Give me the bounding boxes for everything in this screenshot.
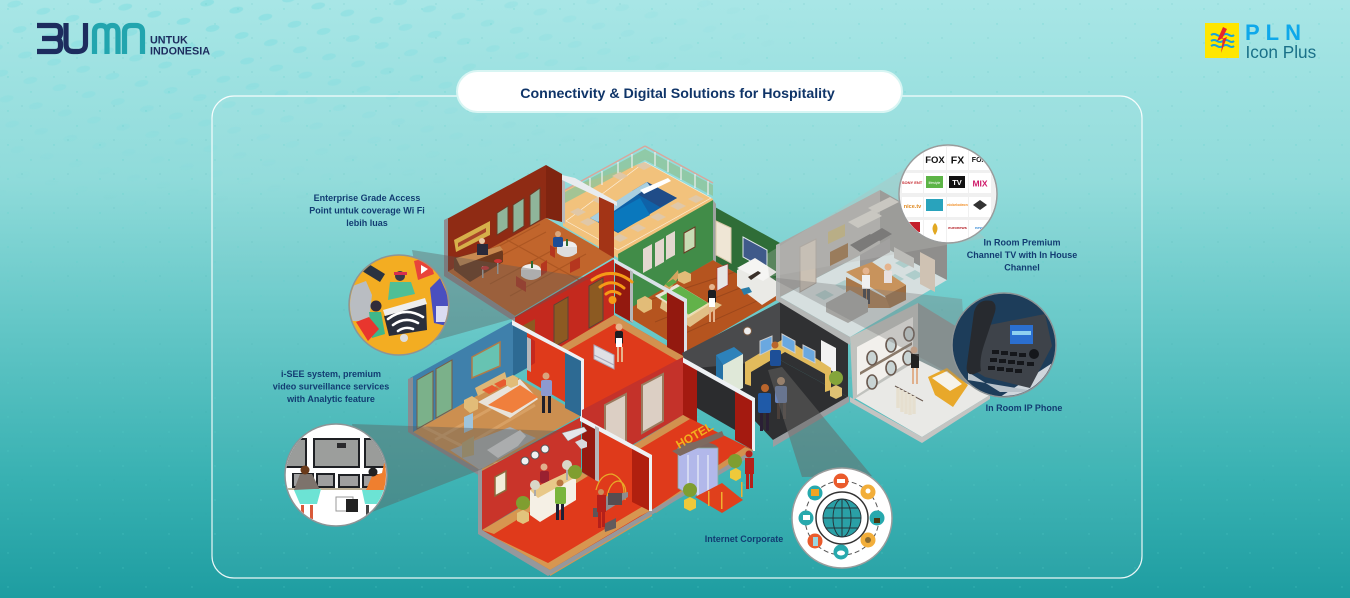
icon: wifi signal [592, 273, 632, 304]
label: ip phone: In Room IP Phone [986, 403, 1062, 413]
visitors [758, 377, 787, 431]
circle: premium tv channels: FOX [925, 155, 945, 166]
beam: cctv [352, 424, 560, 512]
logo: PLN Icon Plus [1205, 20, 1316, 62]
room: upper corridor [515, 258, 687, 412]
room: blue bedroom [408, 320, 584, 476]
label: enterprise access point: Point untuk coverage Wi Fi [309, 206, 425, 216]
lobby front wall [580, 416, 652, 511]
label: premium channel tv: Channel TV with In House [967, 250, 1077, 260]
logo: BUMN Untuk Indonesia: INDONESIA [150, 46, 210, 58]
room: rooftop pool [563, 146, 713, 258]
desk and fridge [717, 258, 777, 305]
label: i-see system: with Analytic feature [286, 394, 375, 404]
label: enterprise access point: Enterprise Grade Access [314, 193, 420, 203]
room: security office [682, 302, 849, 451]
circle: premium tv channels: FOX [972, 157, 987, 164]
panel: main frame [212, 96, 1142, 578]
label: i-see system: i-SEE system, premium [281, 369, 381, 379]
beam: internet corporate [768, 367, 872, 477]
circle: cctv system [285, 424, 388, 526]
bar shelf [454, 221, 503, 282]
reception desk [516, 460, 582, 524]
title pill: Connectivity & Digital Solutions for Hospitality [520, 86, 835, 102]
plant security [829, 371, 843, 399]
hotel isometric illustration [408, 146, 990, 576]
logo: BUMN Untuk Indonesia: UNTUK [150, 34, 188, 46]
circle: premium tv channels: nickelodeon [947, 203, 968, 207]
bellhop with cart [593, 474, 628, 532]
circle: premium tv channels: news [975, 225, 986, 230]
circle: wifi access point [349, 255, 449, 355]
icon: cctv camera [562, 427, 587, 449]
room: green bedroom [618, 200, 780, 352]
logo: PLN Icon Plus: PLN [1245, 20, 1307, 45]
blue room bed [464, 372, 538, 418]
kitchen island [846, 262, 906, 308]
label: internet corporate: Internet Corporate [705, 534, 783, 544]
circle: premium tv channels [899, 145, 999, 245]
label: premium channel tv: In Room Premium [983, 238, 1061, 248]
circle: ip phone [952, 293, 1057, 397]
logo: PLN Icon Plus: Icon Plus [1246, 42, 1316, 62]
room: lobby and elevators [478, 357, 754, 576]
title pill [457, 71, 902, 112]
beam: ip phone [769, 277, 968, 384]
circle: premium tv channels: TV [952, 178, 962, 187]
laundry basket [928, 368, 968, 407]
circle: premium tv channels: FX [951, 154, 964, 166]
maid with cart [594, 324, 623, 369]
circle: premium tv channels: lifestyle [929, 181, 940, 185]
vending machine [716, 347, 743, 398]
restaurant tables [516, 231, 580, 292]
room: kitchen [776, 190, 947, 345]
hotel entrance: HOTEL [674, 419, 716, 452]
beam: wifi access point [412, 250, 590, 342]
man in blue room [541, 372, 552, 413]
label: enterprise access point: lebih luas [346, 218, 388, 228]
circle: premium tv channels: euronews [948, 225, 968, 230]
circle: premium tv channels: MIX [972, 178, 988, 188]
laundry worker [910, 346, 919, 384]
security wall front [682, 357, 755, 451]
beam: premium tv [767, 167, 985, 277]
room: restaurant [444, 165, 617, 322]
hotel entrance [672, 419, 754, 513]
label: i-see system: video surveillance services [273, 382, 389, 392]
circle: premium tv channels: nice.tv [904, 204, 922, 210]
maid in bedroom [708, 284, 716, 322]
label: premium channel tv: Channel [1004, 262, 1040, 272]
clothes rack [895, 386, 923, 415]
bed [637, 270, 722, 327]
logo: BUMN Untuk Indonesia [37, 23, 210, 58]
circle: premium tv channels: SONY ENT [902, 180, 923, 185]
security desk [745, 334, 831, 392]
circle: internet corporate [792, 468, 892, 568]
bathroom [450, 413, 536, 470]
room: laundry [850, 303, 990, 443]
